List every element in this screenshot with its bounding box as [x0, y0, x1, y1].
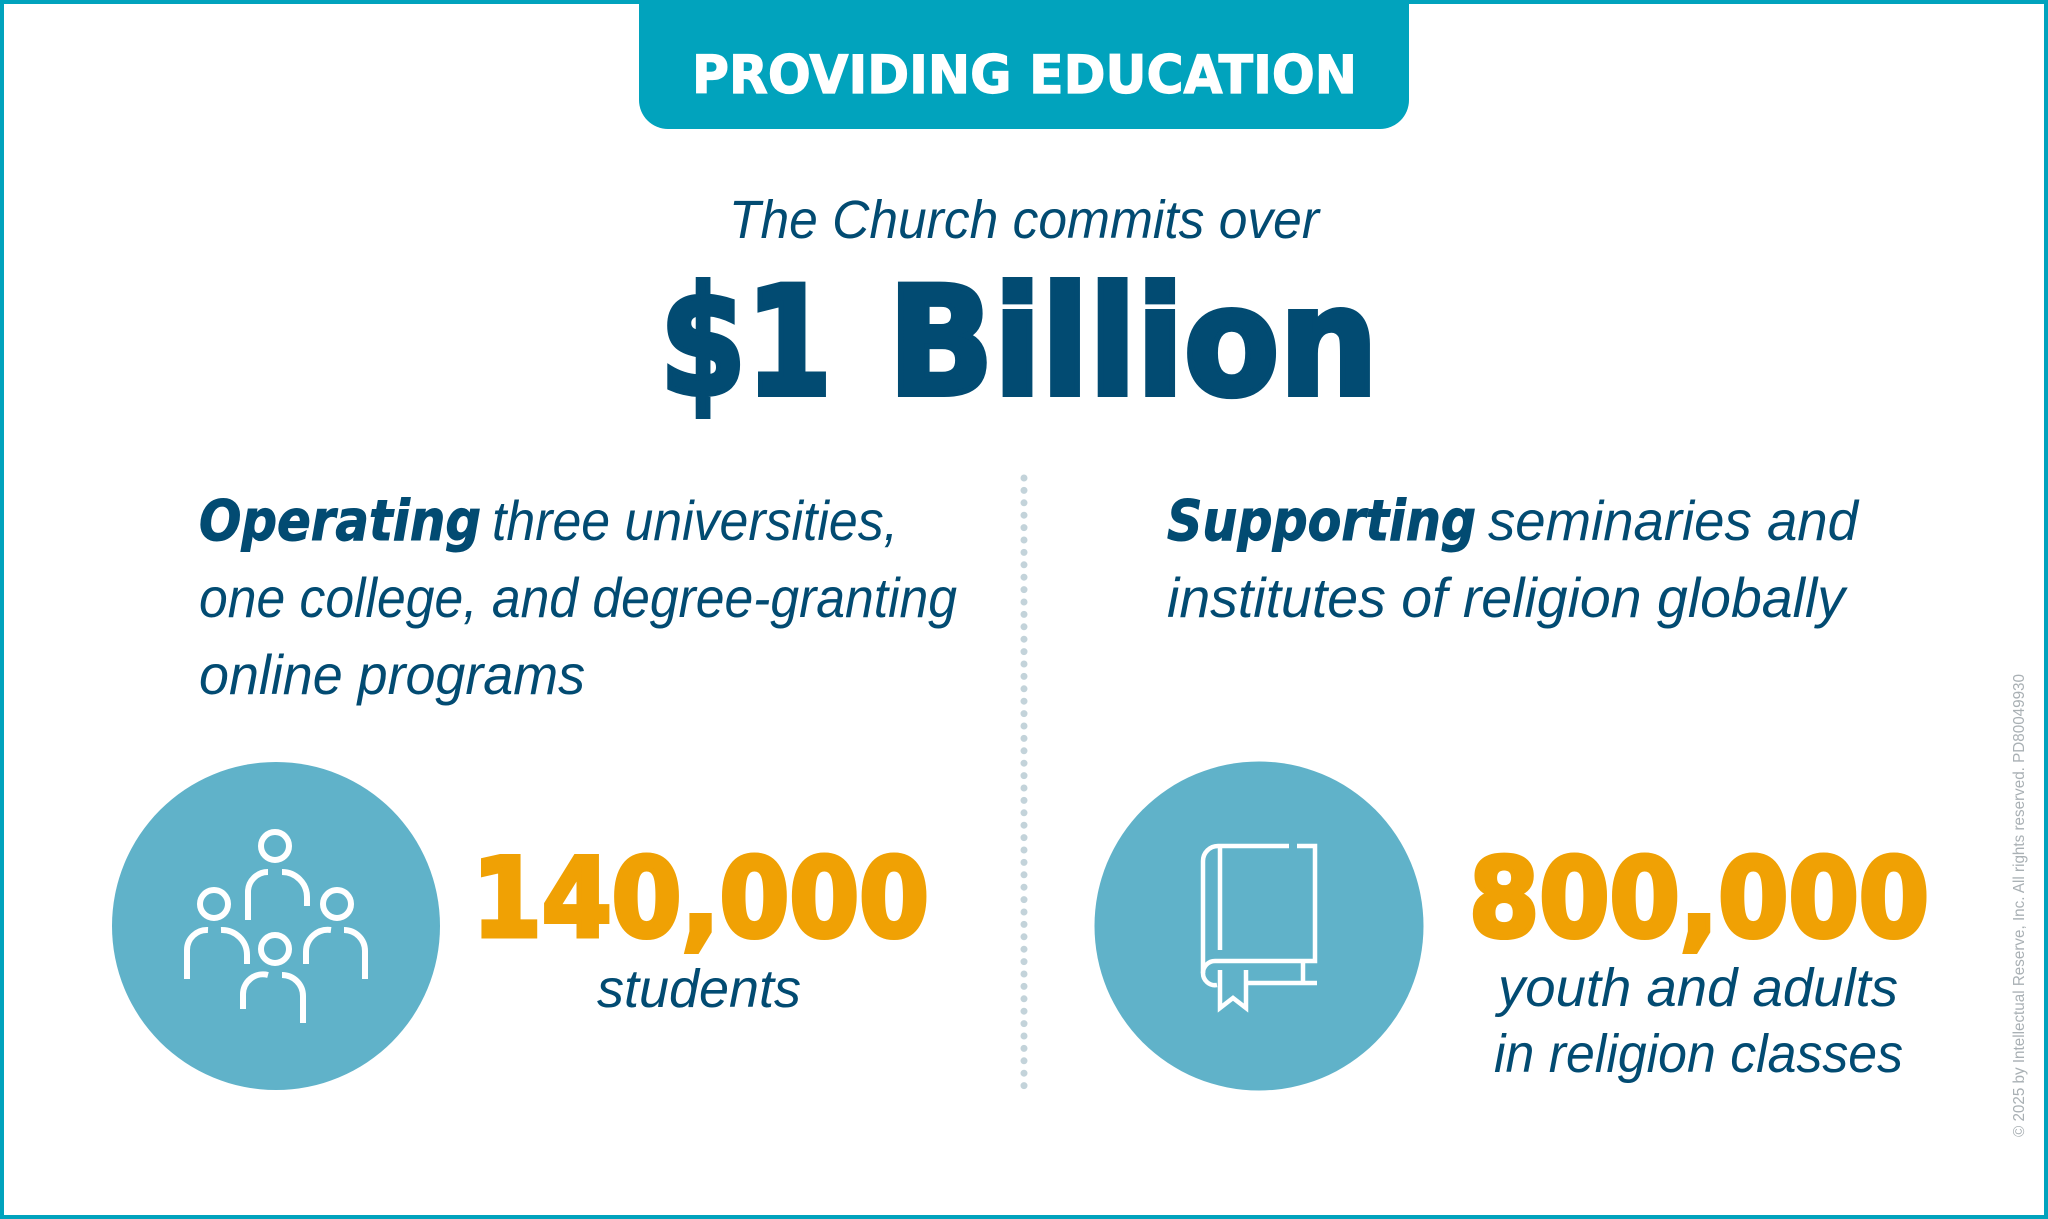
header banner: [639, 0, 1409, 129]
left description: one college, and degree-granting: [199, 566, 957, 629]
right statistic: youth and adults: [1494, 958, 1898, 1018]
icon: book in circle: [1094, 762, 1424, 1090]
copyright note: © 2025 by Intellectual Reserve, Inc. All rights reserved. PD80049930: [2011, 674, 2028, 1137]
left statistic: [472, 835, 929, 1019]
headline amount: Billion: [888, 256, 1378, 430]
left description: Operating: [199, 489, 481, 554]
left statistic: students: [597, 959, 801, 1019]
right statistic: [1469, 835, 1929, 1084]
right description: institutes of religion globally: [1167, 566, 1848, 629]
left description: online programs: [199, 643, 585, 706]
right description: seminaries and: [1488, 489, 1860, 552]
right statistic: 800,000: [1469, 835, 1929, 962]
left description: [199, 489, 957, 706]
intro line: The Church commits over: [729, 190, 1321, 250]
icon: students in circle: [112, 762, 440, 1090]
headline amount: [660, 256, 1378, 430]
left description: three universities,: [492, 489, 898, 552]
left statistic: 140,000: [472, 835, 929, 962]
headline amount: $1: [660, 256, 832, 430]
right statistic: in religion classes: [1494, 1024, 1903, 1084]
center divider: [1020, 478, 1028, 1088]
header banner: PROVIDING EDUCATION: [692, 45, 1357, 106]
right description: [1167, 489, 1860, 629]
right description: Supporting: [1167, 489, 1476, 554]
